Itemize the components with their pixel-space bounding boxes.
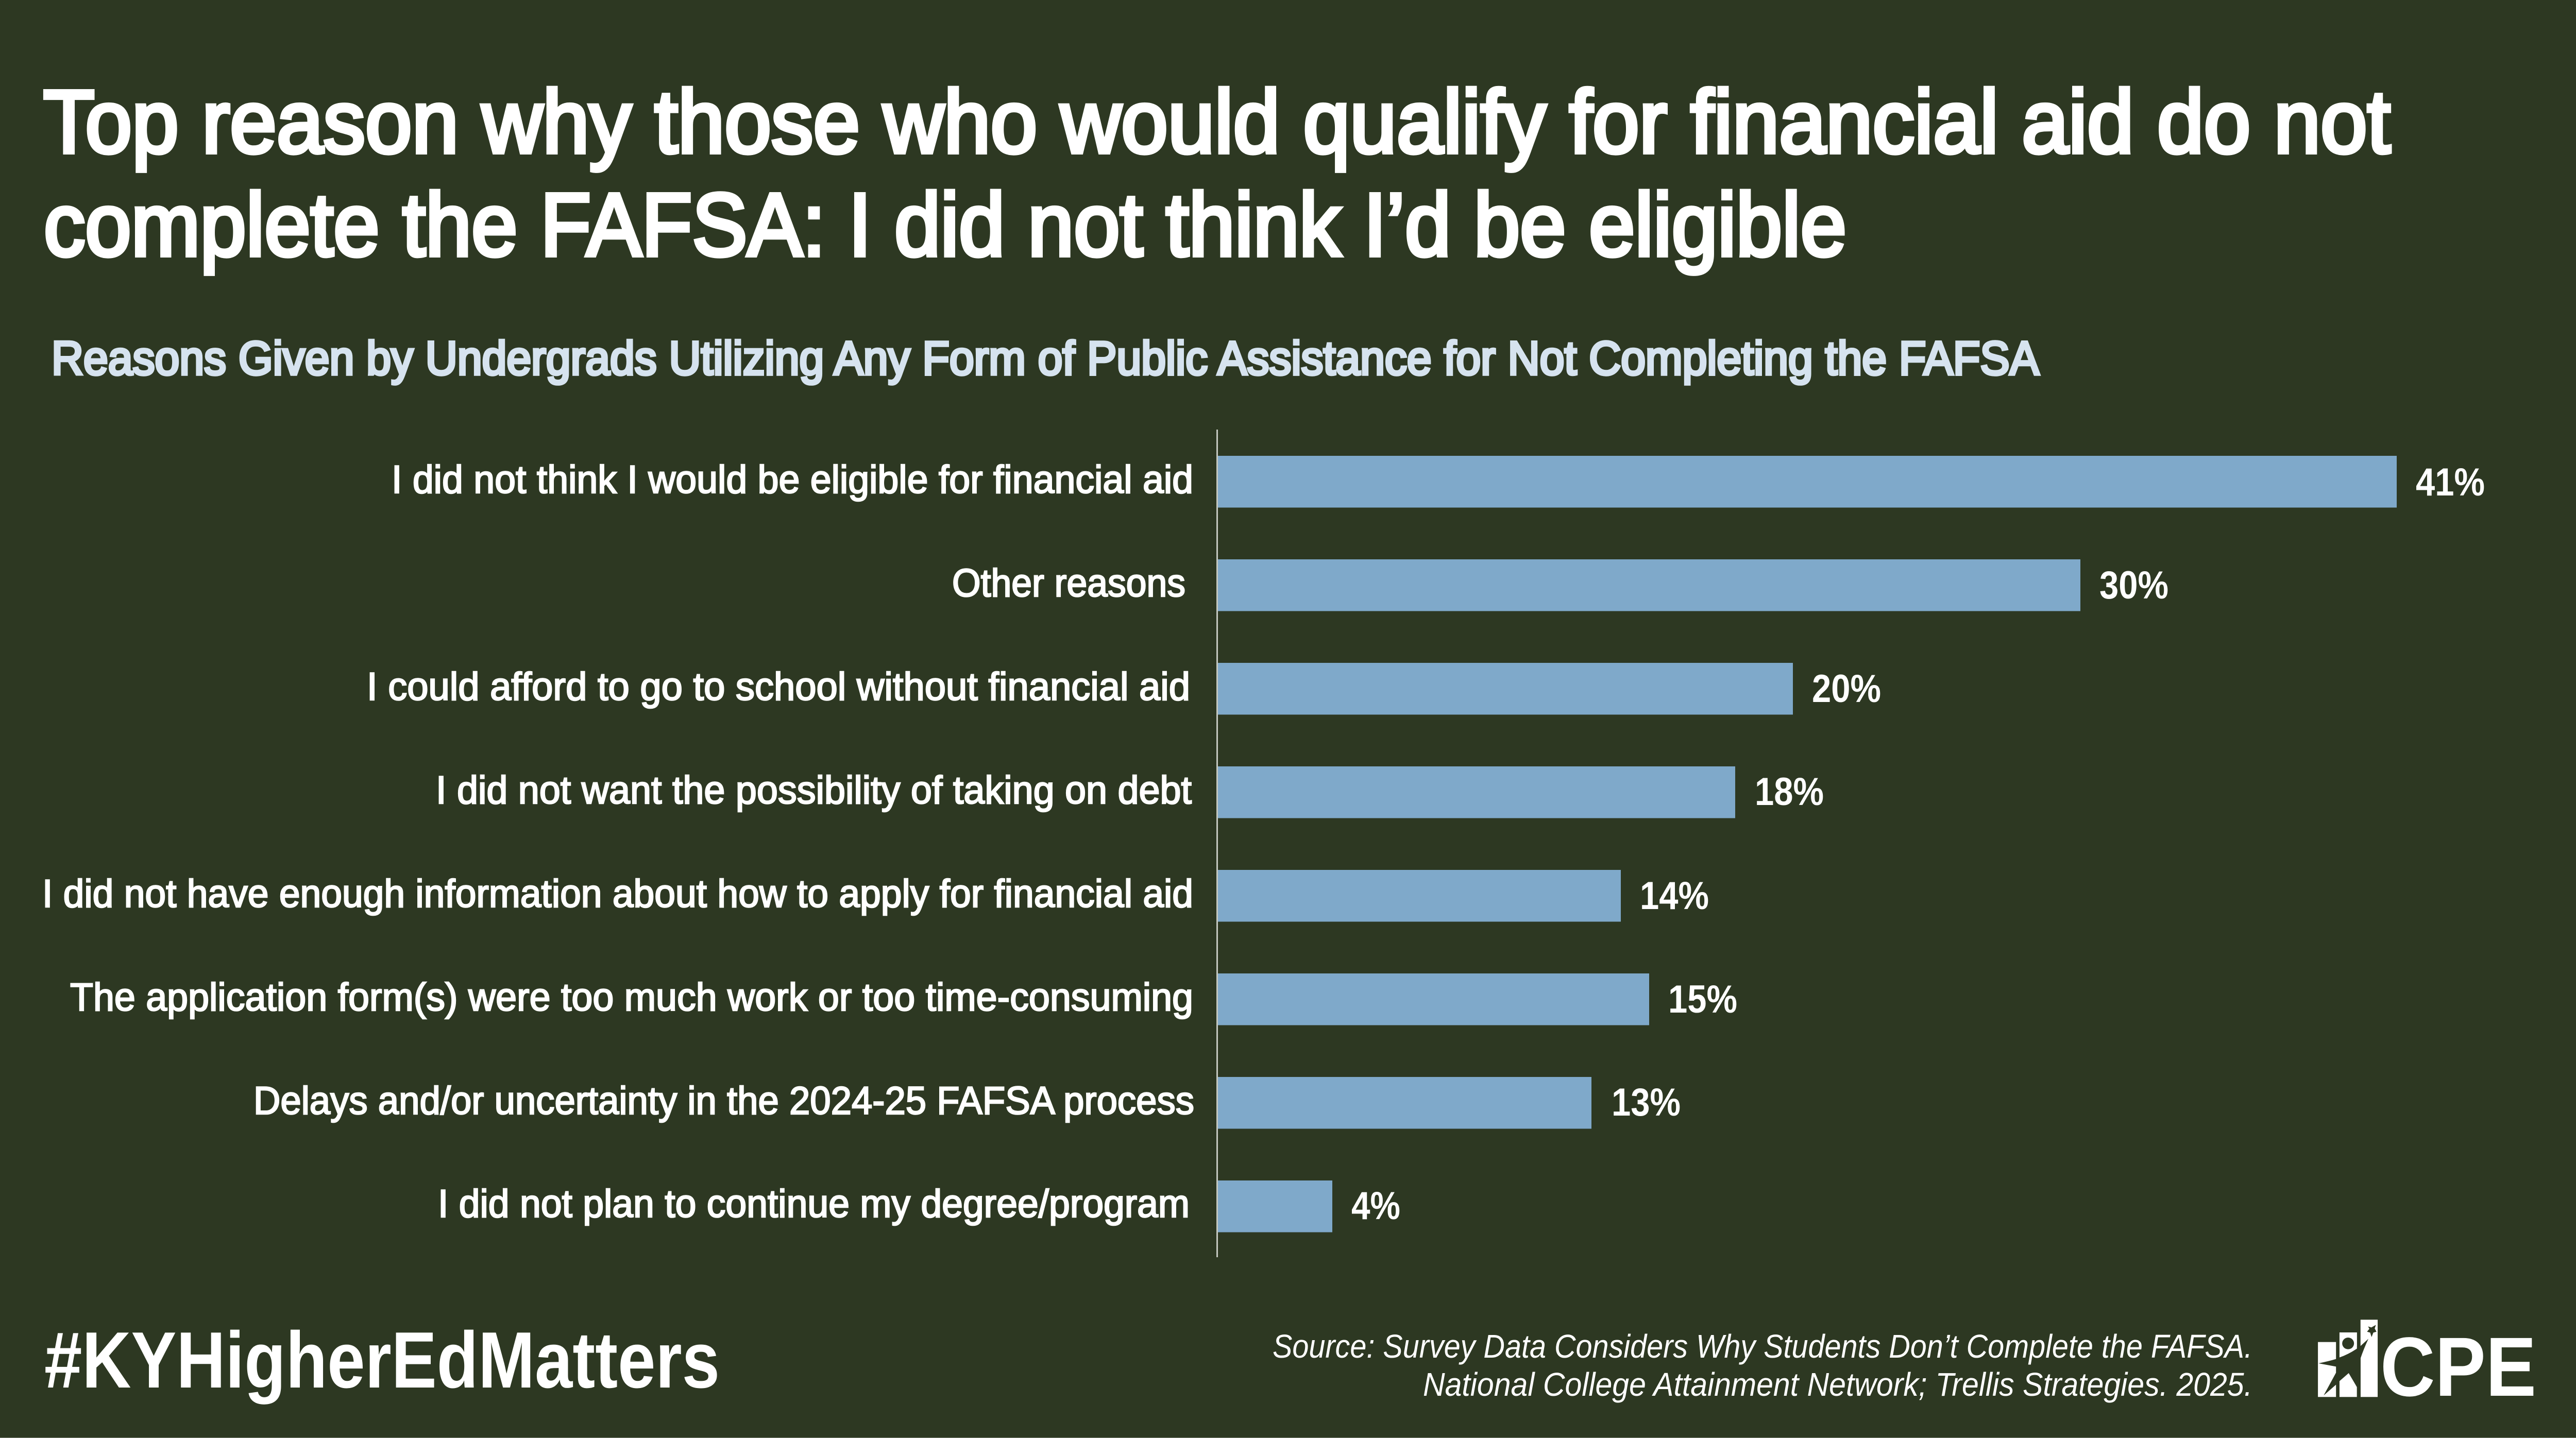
icon: bars with star figure: [2318, 1320, 2378, 1397]
value labels: 20%: [1812, 667, 1881, 711]
category labels: I could afford to go to school without financial aid: [367, 665, 1190, 709]
bar chart: [42, 430, 2485, 1257]
value labels: 15%: [1668, 978, 1737, 1021]
title: complete the FAFSA: I did not think I’d be eligible: [44, 175, 1846, 275]
source note: [1273, 1328, 2252, 1403]
source note: Source: Survey Data Considers Why Students Don’t Complete the FAFSA.: [1273, 1328, 2252, 1365]
value labels: 14%: [1640, 874, 1709, 918]
category labels: I did not think I would be eligible for financial aid: [392, 458, 1193, 502]
logo: CPE: [2318, 1320, 2536, 1414]
logo wordmark: CPE: [2380, 1320, 2536, 1414]
category labels: I did not plan to continue my degree/program: [438, 1182, 1190, 1226]
category labels: Delays and/or uncertainty in the 2024-25 FAFSA process: [253, 1079, 1194, 1123]
title: [43, 72, 2391, 275]
category labels: Other reasons: [952, 561, 1185, 605]
category labels: I did not want the possibility of taking on debt: [436, 768, 1192, 812]
value labels: 13%: [1612, 1081, 1681, 1124]
axis line: [1216, 430, 1218, 1257]
hashtag: #KYHigherEdMatters: [44, 1315, 720, 1405]
value labels: 30%: [2099, 563, 2168, 607]
value labels: 41%: [2416, 460, 2485, 504]
value labels: 4%: [1351, 1184, 1400, 1228]
category labels: I did not have enough information about how to apply for financial aid: [42, 872, 1193, 916]
value labels: [1351, 460, 2485, 1228]
value labels: 18%: [1755, 770, 1824, 814]
bars: [1218, 456, 2397, 1232]
source note: National College Attainment Network; Trellis Strategies. 2025.: [1423, 1366, 2252, 1403]
category labels: [42, 458, 1194, 1226]
category labels: The application form(s) were too much work or too time-consuming: [70, 975, 1193, 1019]
subtitle: Reasons Given by Undergrads Utilizing Any Form of Public Assistance for Not Completing the FAFSA: [52, 332, 2040, 385]
title: Top reason why those who would qualify for financial aid do not: [43, 72, 2391, 172]
